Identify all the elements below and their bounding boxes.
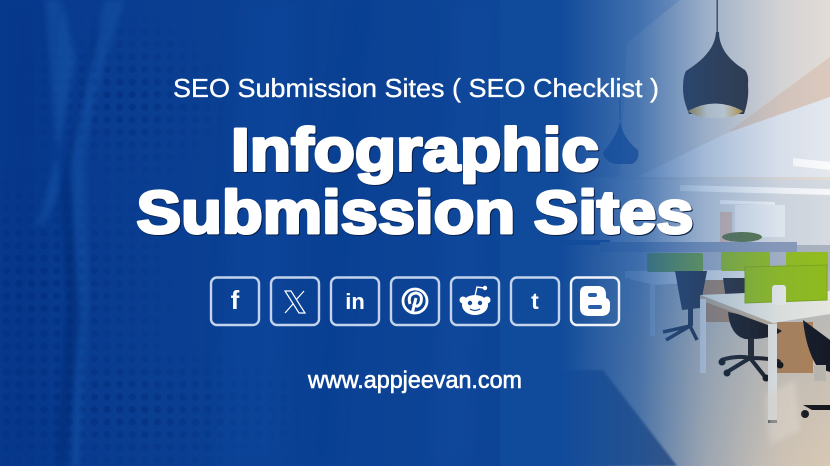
- blue fade over photo: [500, 0, 830, 466]
- plants: [722, 232, 762, 242]
- wood cabinet: [777, 322, 813, 373]
- title: [136, 116, 694, 247]
- beige ceiling strip: [727, 57, 830, 133]
- website url: www.appjeevan.com: [307, 367, 522, 394]
- photo: office interior: [550, 0, 830, 466]
- right bin: [814, 365, 826, 381]
- rear chair: [675, 271, 707, 310]
- partition counter: [600, 242, 797, 252]
- icon: pinterest: [391, 278, 439, 325]
- icon: linkedin: in: [345, 289, 365, 314]
- reflected lamp: [603, 120, 638, 164]
- ceiling lights: [680, 185, 830, 195]
- subtitle: SEO Submission Sites ( SEO Checklist ): [173, 73, 659, 103]
- icon: tumblr: t: [531, 288, 539, 314]
- chair behind front desk: [723, 278, 745, 300]
- icon: X: [271, 278, 319, 325]
- icon: facebook: [211, 278, 259, 325]
- green panel back left: [647, 253, 703, 272]
- foreground dark table: [550, 370, 677, 466]
- icon: tumblr: [511, 278, 559, 325]
- pendant lamp: [683, 32, 748, 114]
- floor: [560, 245, 830, 466]
- lamp gold opening: [688, 104, 743, 118]
- right chair: [803, 320, 830, 372]
- white device on desk: [772, 285, 786, 305]
- back desk surface: [625, 270, 745, 285]
- green panel back right: [786, 252, 828, 267]
- icon: blogger: [571, 278, 619, 325]
- shaded left ceiling section: [560, 0, 680, 177]
- title line 2: Submission Sites: Submission Sites: [138, 180, 694, 247]
- ceiling: [560, 0, 830, 240]
- icon: facebook: f: [231, 285, 240, 315]
- front chair: [728, 312, 782, 339]
- front desk: [700, 291, 830, 323]
- title line 2: Submission Sites: Submission Sites: [136, 179, 694, 246]
- background: blue crumpled paper: [0, 0, 211, 466]
- floor reflection: [765, 380, 800, 445]
- icon: reddit: [451, 278, 499, 325]
- green panel front: [745, 265, 827, 303]
- title line 1: Infographic: Infographic: [232, 118, 600, 184]
- green panel back middle: [721, 252, 770, 271]
- back wall: [610, 180, 830, 245]
- pendant lamp cord: [716, 0, 718, 34]
- back wood cabinet: [700, 280, 746, 322]
- social icon row: [211, 278, 619, 325]
- icon: linkedin: [331, 278, 379, 325]
- title line 1: Infographic: Infographic: [231, 116, 599, 184]
- lower ceiling beam: [637, 97, 830, 177]
